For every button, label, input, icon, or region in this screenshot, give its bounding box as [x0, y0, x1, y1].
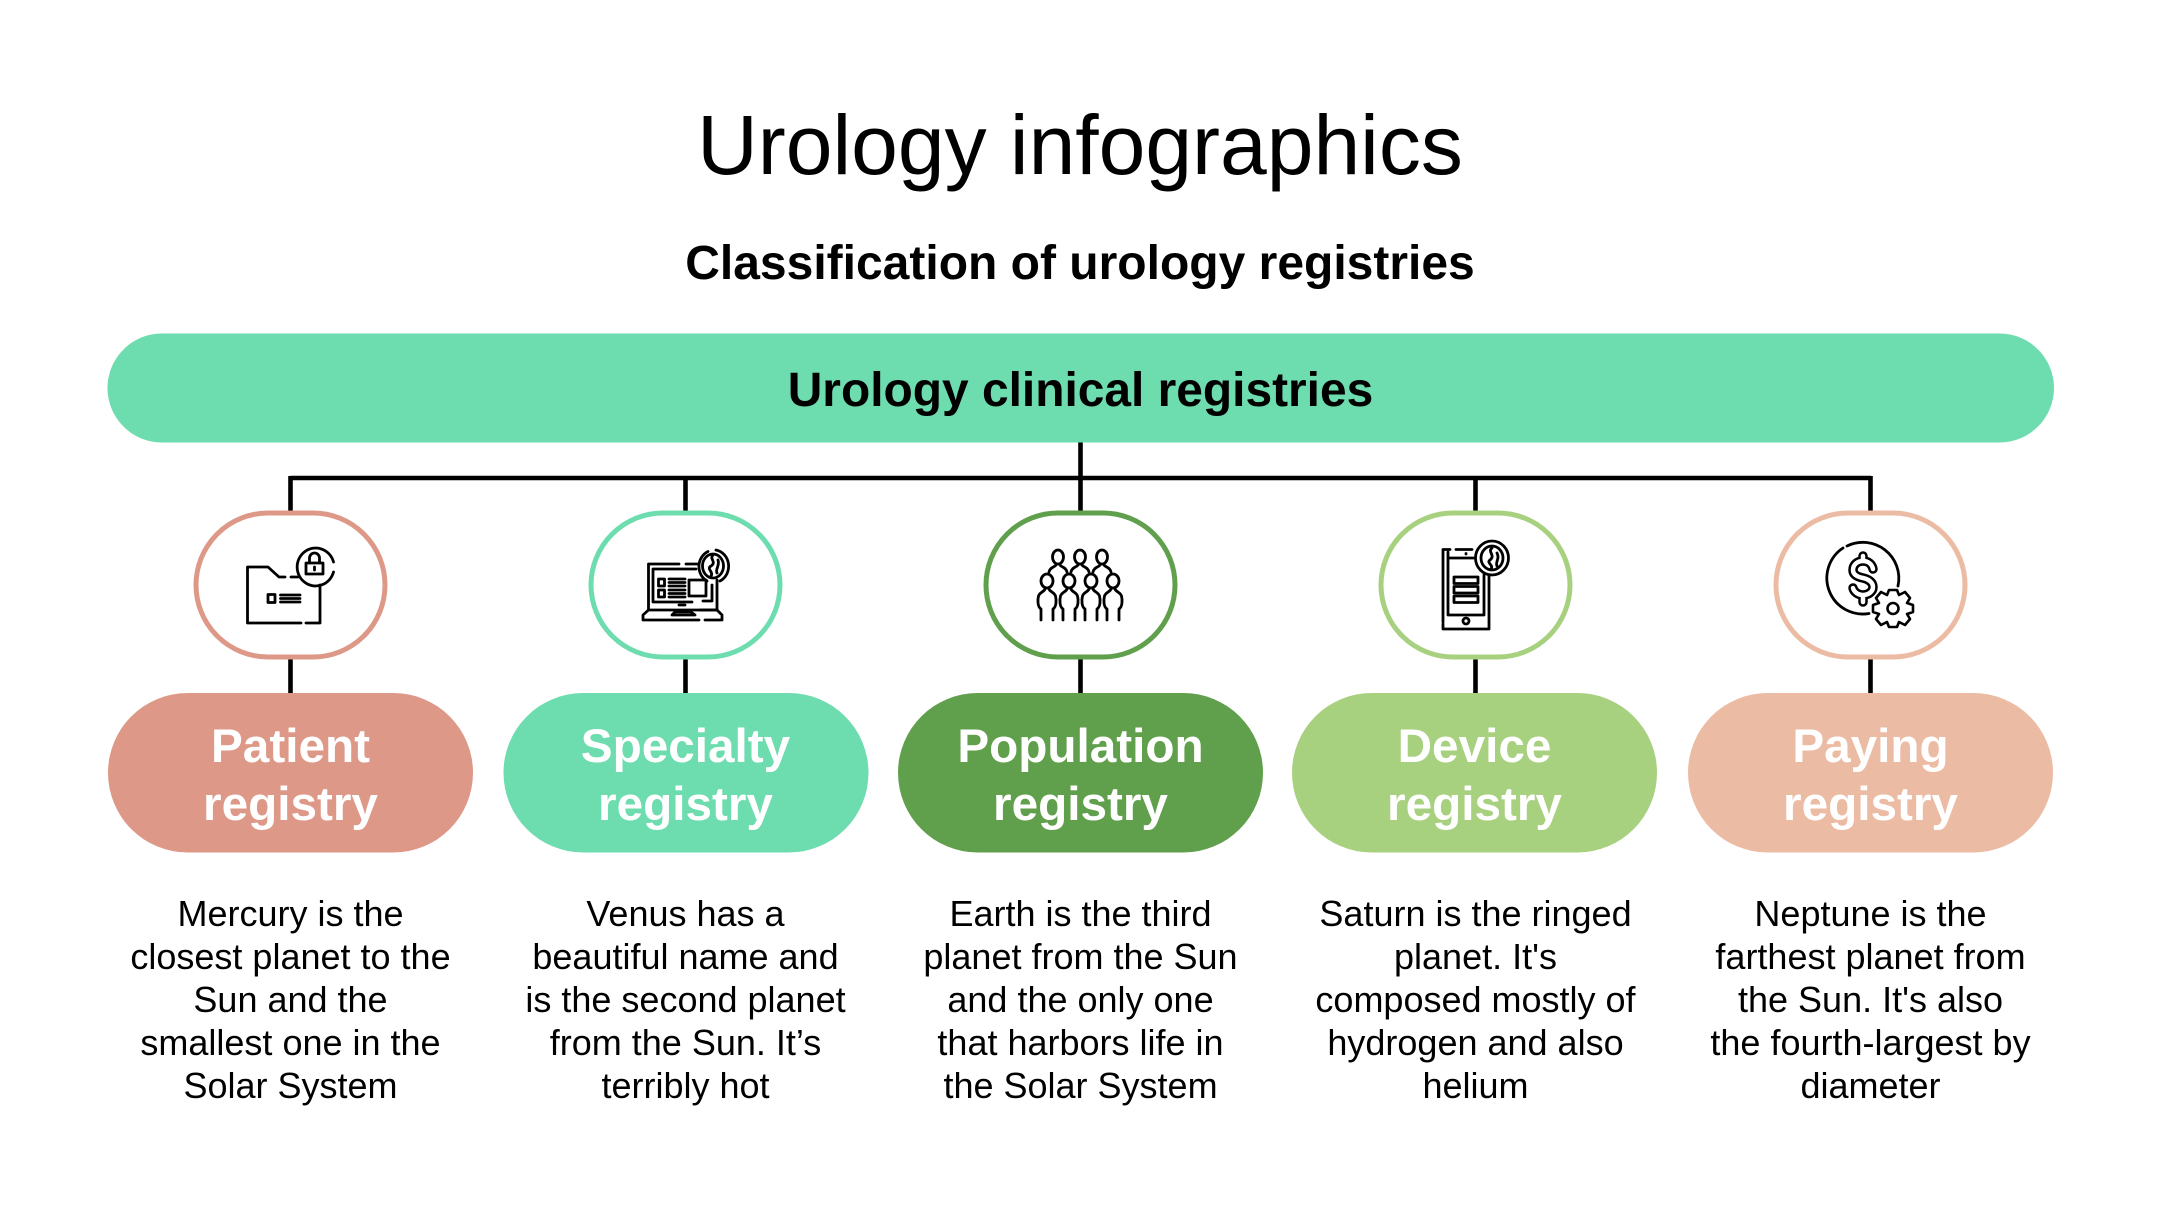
description: Specialty registry — [525, 893, 846, 1106]
description: Specialty registry: is the second planet — [525, 979, 846, 1020]
icon badge: dollar coin with gear — [1776, 513, 1965, 657]
column: Patient registry — [108, 513, 473, 1106]
description: Specialty registry: Venus has a — [586, 893, 786, 934]
description: Patient registry: Sun and the — [193, 979, 388, 1020]
description: Patient registry: closest planet to the — [130, 936, 451, 977]
description: Population registry: planet from the Sun — [923, 936, 1238, 977]
description: Patient registry: Mercury is the — [177, 893, 404, 934]
description: Population registry: Earth is the third — [949, 893, 1212, 934]
column: Specialty registry — [504, 513, 868, 1106]
pill: Population registry: registry — [993, 778, 1168, 831]
description: Specialty registry: terribly hot — [601, 1065, 770, 1106]
pill: Specialty registry: Specialty — [581, 720, 791, 773]
pill: Device registry: Device — [1398, 720, 1551, 773]
description: Paying registry: the fourth-largest by — [1710, 1022, 2031, 1063]
pill: Population registry: Population — [957, 720, 1204, 773]
column: Device registry — [1292, 513, 1657, 1106]
dollar sign — [1853, 556, 1873, 602]
pill: Device registry — [1292, 693, 1657, 852]
pill: Paying registry — [1688, 693, 2053, 852]
pill: Specialty registry — [504, 693, 868, 852]
description: Paying registry: farthest planet from — [1715, 936, 2026, 977]
column: Paying registry — [1688, 513, 2053, 1106]
description: Specialty registry: beautiful name and — [532, 936, 839, 977]
description: Paying registry — [1710, 893, 2031, 1106]
pill: Paying registry: Paying — [1792, 720, 1949, 773]
description: Paying registry: diameter — [1800, 1065, 1941, 1106]
description: Population registry: the Solar System — [943, 1065, 1218, 1106]
description: Device registry: helium — [1422, 1065, 1529, 1106]
description: Device registry: Saturn is the ringed — [1319, 893, 1632, 934]
icon badge: smartphone with globe — [1381, 513, 1570, 657]
pill: Patient registry — [108, 693, 473, 852]
description: Specialty registry: from the Sun. It’s — [550, 1022, 821, 1063]
icon badge: laptop with globe — [591, 513, 780, 657]
top bar: Urology clinical registries — [108, 334, 2054, 442]
description: Paying registry: Neptune is the — [1754, 893, 1987, 934]
description: Paying registry: the Sun. It's also — [1738, 979, 2003, 1020]
description: Population registry — [923, 893, 1238, 1106]
pill: Patient registry: registry — [203, 778, 378, 831]
description: Patient registry — [130, 893, 451, 1106]
pill: Device registry: registry — [1387, 778, 1562, 831]
pill: Paying registry: registry — [1783, 778, 1958, 831]
description: Population registry: and the only one — [947, 979, 1214, 1020]
description: Device registry: hydrogen and also — [1327, 1022, 1624, 1063]
description: Patient registry: smallest one in the — [140, 1022, 441, 1063]
icon badge: patient folder with lock — [196, 513, 385, 657]
description: Population registry: that harbors life in — [937, 1022, 1224, 1063]
column: Population registry — [898, 513, 1263, 1106]
title: Urology infographics — [697, 98, 1463, 192]
top bar: Urology clinical registries: Urology clinical registries — [788, 364, 1373, 417]
description: Device registry: planet. It's — [1394, 936, 1557, 977]
pill: Specialty registry: registry — [598, 778, 773, 831]
pill: Patient registry: Patient — [211, 720, 370, 773]
connector lines — [290, 440, 1871, 695]
icon badge: group of people — [986, 513, 1175, 657]
description: Patient registry: Solar System — [183, 1065, 398, 1106]
description: Device registry — [1315, 893, 1637, 1106]
pill: Population registry — [898, 693, 1263, 852]
description: Device registry: composed mostly of — [1315, 979, 1637, 1020]
subtitle: Classification of urology registries — [685, 237, 1475, 290]
gear — [1873, 590, 1913, 627]
